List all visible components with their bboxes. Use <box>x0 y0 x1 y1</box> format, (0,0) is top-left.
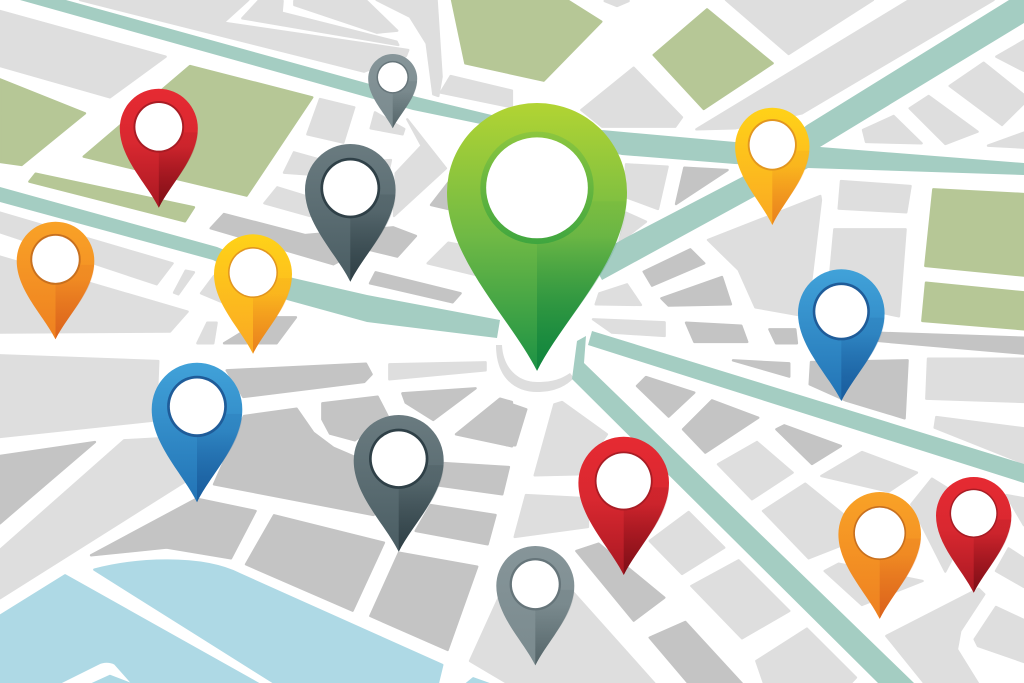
pin: yellow left <box>214 234 292 354</box>
pin: small grey <box>368 54 417 128</box>
teal road: top <box>20 0 1024 175</box>
teal road: west <box>0 187 500 338</box>
pin: red upper left <box>120 89 198 208</box>
pin: blue left <box>152 363 242 502</box>
blocks: top left quadrant <box>0 0 512 343</box>
teal road: east <box>588 331 1024 483</box>
pin: red right <box>936 477 1011 593</box>
pin: yellow right <box>735 108 810 225</box>
pin: red centre <box>578 437 669 575</box>
pin: slate lower <box>354 415 444 552</box>
blocks: bottom right quadrant <box>470 333 1024 683</box>
roundabout ring <box>496 345 574 392</box>
blocks: bottom left quadrant <box>0 355 512 683</box>
pin: orange left <box>17 222 94 339</box>
pin: grey lower <box>496 546 574 665</box>
pin: blue right <box>798 269 885 401</box>
blocks: top right quadrant <box>452 0 1024 343</box>
pin: orange right <box>838 492 921 619</box>
pin: slate upper <box>305 144 396 282</box>
teal road: north east diagonal <box>590 0 1024 280</box>
pin: large green centre <box>447 103 627 371</box>
teal road: south east <box>572 336 914 683</box>
